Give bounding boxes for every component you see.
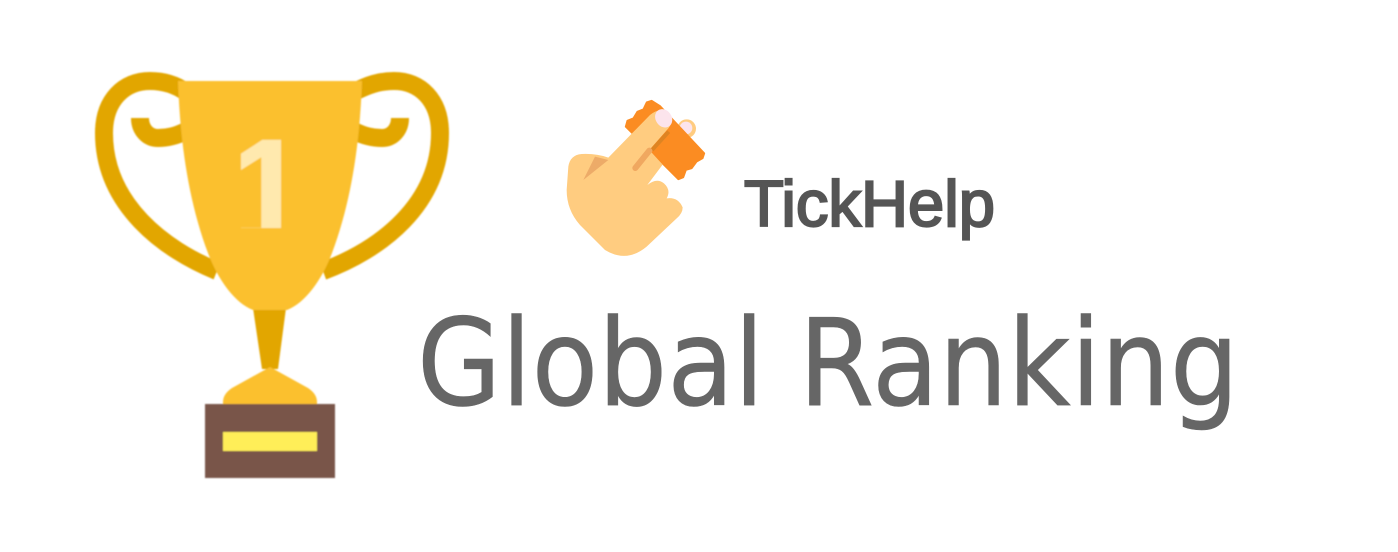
trophy number 1: 1 (226, 107, 310, 275)
thumb shadow (583, 157, 608, 180)
logo: hand holding ticket (567, 101, 704, 256)
title: Global Ranking (417, 295, 1239, 434)
trophy plinth (205, 404, 335, 478)
hand (567, 110, 683, 256)
hidden fingertip (677, 119, 696, 138)
trophy cup (178, 81, 362, 310)
icon: gold trophy (104, 81, 440, 478)
finger shadow on ticket (652, 132, 669, 150)
trophy right handle (323, 81, 440, 271)
trophy stem (253, 308, 286, 369)
ticket (626, 101, 704, 179)
trophy plaque (223, 432, 317, 451)
finger shadow (635, 151, 649, 168)
brand name: TickHelp (744, 167, 995, 240)
trophy left handle (104, 81, 217, 271)
trophy base mound (223, 367, 317, 406)
infographic canvas (94, 70, 1230, 479)
fingernail (652, 106, 676, 131)
